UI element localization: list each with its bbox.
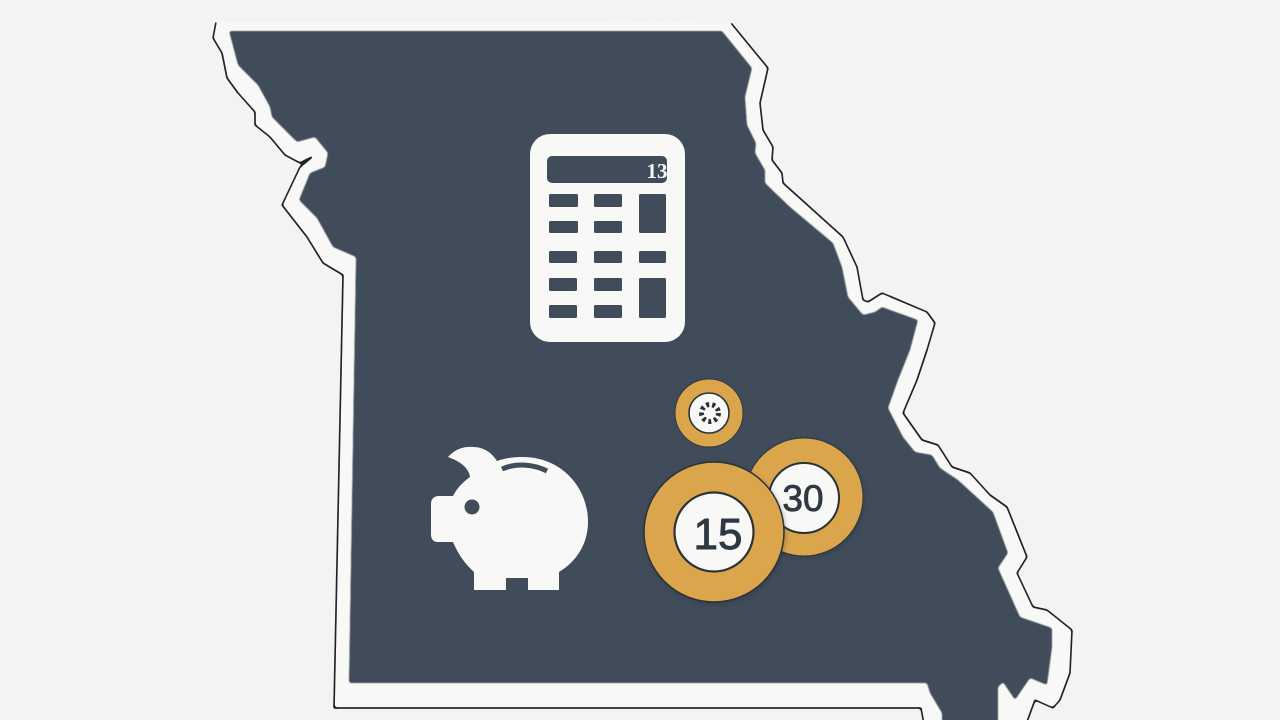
map outer black outline, east [731,23,1072,720]
map navy fill [229,31,1052,720]
icon: piggy bank [431,447,588,590]
coin: 30 [745,438,863,556]
map white border band [213,22,1072,720]
piggy eye [464,500,480,514]
calculator display: 13 [646,159,668,183]
piggy coin slot [502,465,547,471]
calculator keys [549,194,666,318]
map outer black outline, west [213,22,925,720]
map: Missouri state silhouette [213,22,1072,720]
coin: 15 [644,462,784,602]
icon: calculator [530,134,685,342]
calculator display [547,156,668,183]
coin: 30: 30 [782,478,824,519]
coin: 15: 15 [694,510,742,559]
icon: small coin [675,379,743,447]
